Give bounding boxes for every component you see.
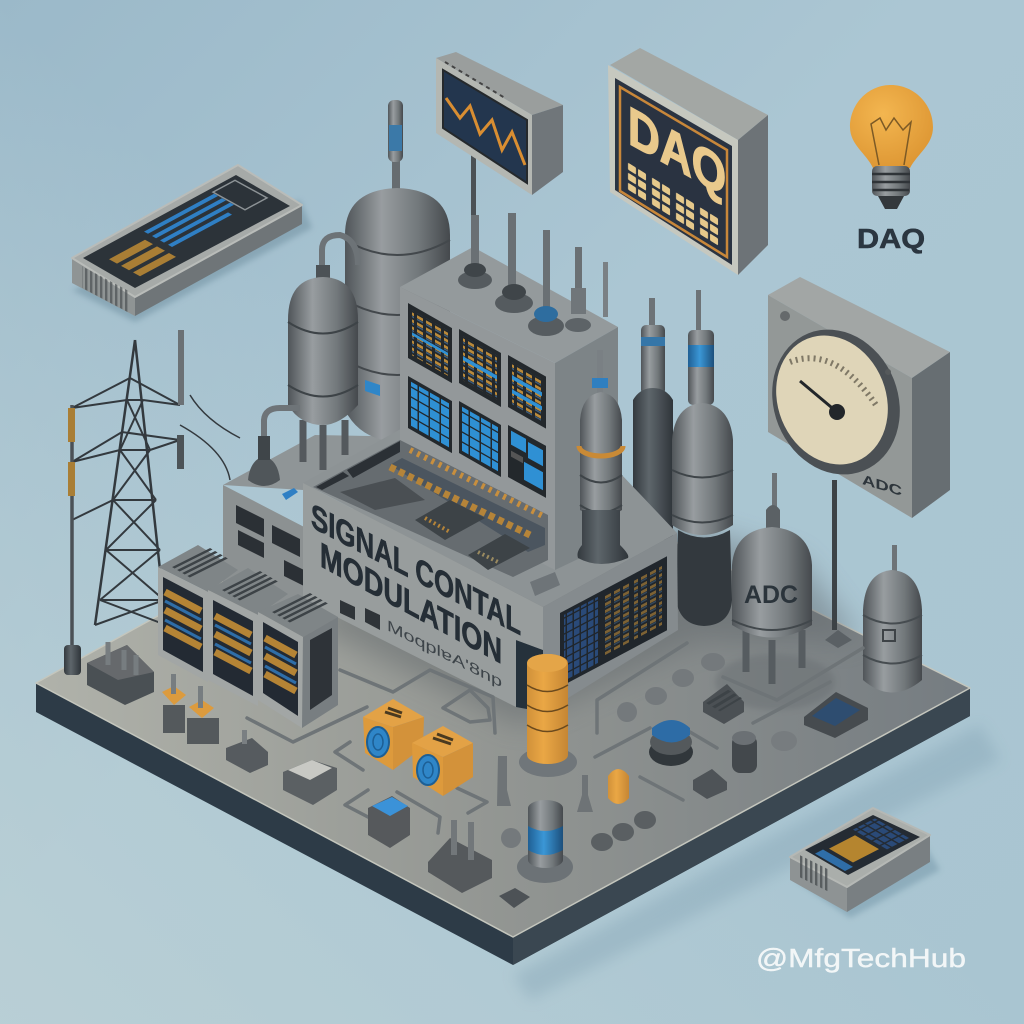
pipework on platform — [247, 643, 863, 833]
watermark: @MfgTechHub — [756, 943, 966, 973]
probe with orange ring — [578, 350, 628, 564]
pipe fitting on left block — [248, 408, 300, 486]
label: DAQ under bulb: DAQ — [857, 223, 925, 254]
icon: light bulb — [850, 85, 933, 209]
small parts on right side of platform — [497, 653, 868, 851]
label: ADC on gauge: ADC — [862, 472, 902, 500]
server rack 3 — [258, 593, 338, 728]
component: relay block 2 — [283, 760, 337, 805]
cylinder: orange stacked — [519, 654, 577, 777]
part: wound coil blue — [649, 720, 693, 766]
part: grey finned block — [703, 684, 744, 724]
part: fin block lower — [693, 769, 727, 799]
main block with title text — [303, 409, 678, 712]
insulator probes on roof — [458, 213, 608, 336]
screen: blue grid left — [408, 376, 452, 453]
platform base — [36, 442, 1000, 1000]
part: post — [497, 756, 511, 806]
label: ADC on tank: ADC — [744, 581, 798, 609]
screen panel on right face — [560, 556, 667, 687]
subtitle: small caption: MoqplɐA'8np — [387, 618, 502, 691]
tank: left vessel — [288, 235, 358, 470]
left lower block — [223, 435, 420, 640]
screen: upper data right — [508, 355, 546, 429]
dark column probe — [633, 298, 673, 540]
switches on left block — [236, 505, 304, 586]
console with knobs — [313, 440, 548, 577]
component: blue-topped module — [368, 796, 410, 848]
part: post fitting — [577, 775, 593, 812]
tower block with screens — [400, 213, 618, 570]
cylinder: blue banded — [517, 800, 573, 883]
screen: upper data left — [408, 303, 452, 383]
monitor: waveform display — [436, 52, 563, 260]
component: relay block 1 — [226, 730, 268, 773]
component: orange-capped terminals — [162, 674, 219, 744]
panel: DAQ sign — [608, 48, 768, 275]
screen: upper data centre — [459, 329, 501, 407]
part: orange barrel — [608, 769, 629, 804]
device: top-left data logger — [72, 165, 312, 322]
server rack 1 — [158, 545, 238, 682]
part: control box — [804, 692, 868, 738]
title: Modulation: MODULATION — [320, 534, 502, 672]
device: bottom-right handheld — [790, 808, 940, 918]
part: caps — [501, 653, 725, 848]
tank labelled ADC — [715, 473, 835, 710]
component: chip — [499, 888, 530, 908]
part: small knob — [771, 731, 797, 751]
tank with blue-banded probe — [672, 290, 733, 626]
label: DAQ on sign: DAQ — [628, 95, 726, 209]
panel: analog gauge — [751, 277, 950, 648]
screen: blue grid centre — [459, 401, 501, 477]
cube: orange left — [363, 699, 424, 770]
server rack 2 — [208, 568, 288, 706]
component: small transformer left — [87, 642, 154, 705]
power transmission tower — [64, 330, 240, 675]
tank: large rear vessel — [345, 100, 450, 442]
tank: right vessel — [863, 545, 922, 692]
component: twin-post transformer — [428, 820, 492, 893]
title: Signal Contal: SIGNAL CONTAL — [311, 495, 521, 643]
screen: blue grid right — [508, 425, 546, 498]
cube: orange right — [412, 726, 473, 796]
small switch on main block — [340, 600, 380, 630]
part: nuts — [591, 811, 656, 851]
part: dark coil — [732, 731, 757, 773]
